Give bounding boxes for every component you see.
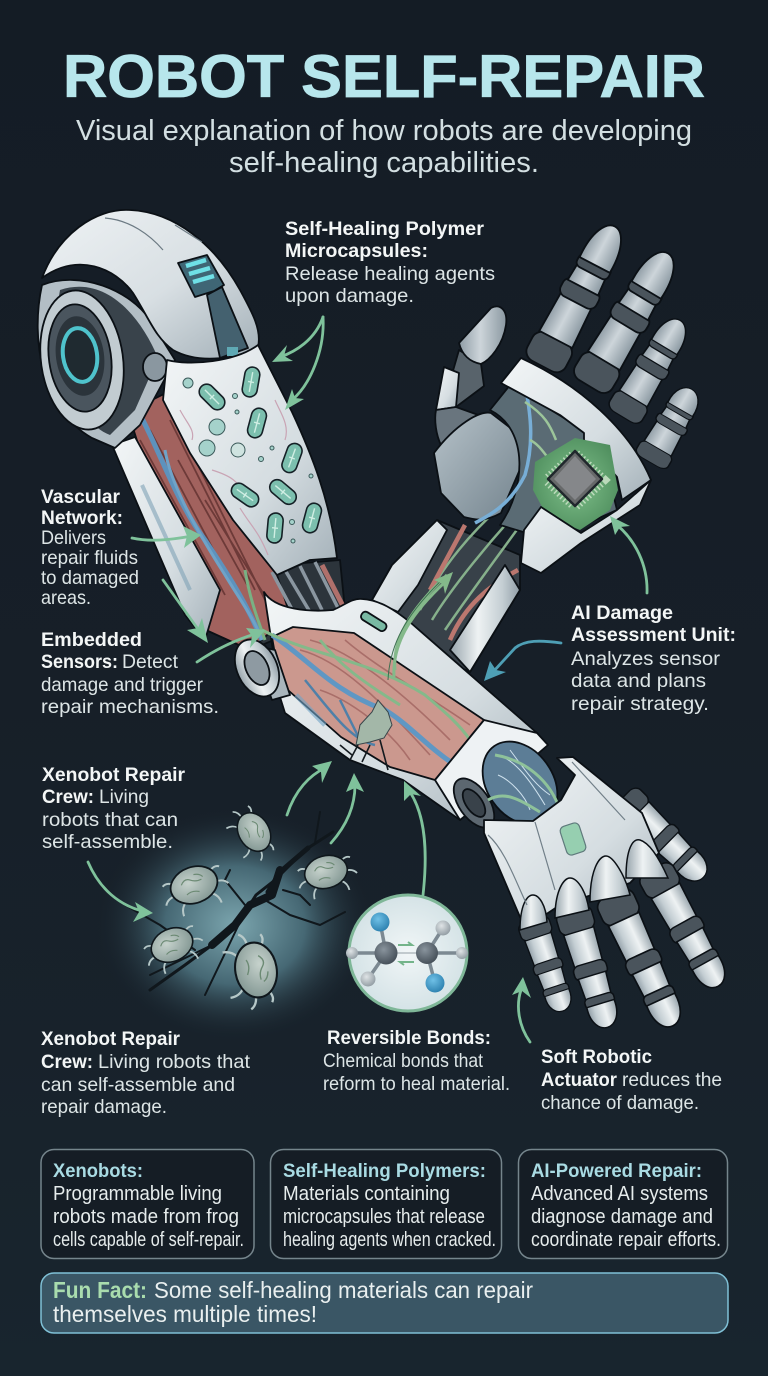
label: reversible bonds: Reversible Bonds: bbox=[327, 1028, 491, 1049]
callout: fun fact: themselves multiple times! bbox=[53, 1301, 317, 1327]
label: ai damage assessment unit: data and plans bbox=[571, 670, 706, 692]
lower palm plate bbox=[521, 480, 651, 573]
label: xenobot repair crew lower: Living robots that bbox=[98, 1051, 251, 1073]
label: vascular network: Delivers bbox=[41, 527, 106, 549]
forearm shell bbox=[264, 592, 537, 820]
illustration: forearm with exposed tissue bbox=[226, 575, 548, 820]
callout: fun fact: Fun Fact: bbox=[53, 1277, 147, 1303]
left metal strip bbox=[112, 437, 220, 640]
label: reversible bonds: Chemical bonds that bbox=[323, 1050, 484, 1072]
label: soft robotic actuator: chance of damage. bbox=[541, 1092, 699, 1114]
label: soft robotic actuator: Soft Robotic bbox=[541, 1047, 652, 1068]
label: xenobot repair crew lower: can self-assemble and bbox=[41, 1074, 235, 1096]
elbow joint bbox=[226, 632, 290, 704]
panel: ai-powered repair: coordinate repair efforts. bbox=[531, 1229, 721, 1251]
label: xenobot repair crew upper: Crew: bbox=[42, 787, 94, 808]
label: self-healing polymer microcapsules: upon damage. bbox=[285, 285, 414, 307]
palm top band bbox=[501, 358, 651, 500]
label: ai damage assessment unit: Analyzes sensor bbox=[571, 648, 721, 670]
illustration: upper robotic arm bbox=[32, 210, 345, 650]
back of hand bbox=[484, 757, 659, 927]
thumb bbox=[435, 306, 506, 445]
label: xenobot repair crew upper: self-assemble. bbox=[42, 831, 173, 853]
panel: self-healing polymers: Materials containing bbox=[283, 1183, 450, 1205]
arrow: teal to forearm bbox=[484, 641, 561, 681]
side bolt bbox=[143, 353, 167, 381]
label: vascular network bbox=[41, 487, 139, 609]
label: ai damage assessment unit: Assessment Unit: bbox=[571, 625, 736, 646]
arrow: crack to forearm 2 bbox=[331, 773, 364, 843]
label: xenobot repair crew upper: Living bbox=[99, 786, 149, 808]
panel: ai-powered repair: diagnose damage and bbox=[531, 1206, 713, 1228]
indicator and seams bbox=[559, 822, 587, 856]
arrow: soft robotic actuator bbox=[512, 977, 531, 1042]
label: embedded sensors: repair mechanisms. bbox=[41, 696, 219, 718]
panel: ai-powered repair: AI-Powered Repair: bbox=[531, 1160, 702, 1182]
thumb bbox=[610, 785, 716, 890]
lower fingers bbox=[517, 859, 735, 1034]
arrows: self-healing microcapsules bbox=[272, 317, 323, 410]
label: soft robotic actuator: Actuator bbox=[541, 1070, 618, 1091]
panel: xenobots: Xenobots: bbox=[53, 1160, 143, 1182]
arrow: xenobot crew bbox=[88, 862, 153, 922]
knuckle caps bbox=[520, 840, 668, 930]
label: ai damage assessment unit: repair strategy. bbox=[571, 693, 709, 715]
ai chip on green board bbox=[533, 438, 618, 530]
panel: self-healing polymers bbox=[270, 1150, 502, 1258]
label: xenobot repair crew lower: repair damage. bbox=[41, 1096, 167, 1118]
arrow: crack to forearm 1 bbox=[287, 761, 332, 815]
label: xenobot repair crew lower: Crew: bbox=[41, 1052, 93, 1073]
panel: ai-powered repair: Advanced AI systems bbox=[531, 1183, 708, 1205]
damage patch bbox=[340, 700, 392, 770]
arrow: embedded sensors 1 bbox=[163, 580, 208, 643]
illustration: wrist joint bbox=[446, 727, 573, 839]
label: vascular network: Vascular bbox=[41, 487, 121, 508]
arrow: reversible bonds bbox=[404, 781, 425, 895]
subtitle: self-healing capabilities. bbox=[229, 147, 539, 179]
collar bbox=[435, 720, 548, 820]
label: embedded sensors: Detect bbox=[122, 651, 179, 673]
tissue window bbox=[262, 575, 484, 780]
blue vessel bbox=[475, 378, 531, 523]
microcapsules bbox=[196, 366, 323, 544]
dome blue strip and indicator bbox=[178, 255, 248, 358]
panel: ai-powered repair bbox=[518, 1150, 728, 1258]
label: embedded sensors bbox=[41, 630, 219, 718]
illustration: lower robotic hand bbox=[484, 757, 735, 1034]
panel: xenobots: cells capable of self-repair. bbox=[53, 1229, 244, 1251]
palm plate bbox=[434, 413, 521, 520]
label: ai damage assessment unit: AI Damage bbox=[571, 603, 673, 624]
panel: self-healing polymers: microcapsules that release bbox=[283, 1206, 485, 1228]
panel: self-healing polymers: healing agents when cracked. bbox=[283, 1229, 496, 1251]
armor plate with capsules bbox=[163, 345, 337, 575]
label: xenobot repair crew lower: Xenobot Repair bbox=[41, 1029, 181, 1050]
title: ROBOT SELF-REPAIR bbox=[63, 43, 705, 110]
dome bbox=[42, 210, 259, 359]
arrow: ai damage assessment bbox=[610, 516, 647, 593]
label: ai damage assessment unit bbox=[571, 603, 736, 715]
label: soft robotic actuator bbox=[541, 1047, 722, 1114]
panel: xenobots: Programmable living bbox=[53, 1183, 222, 1205]
panel: self-healing polymers: Self-Healing Polymers: bbox=[283, 1160, 486, 1182]
label: self-healing polymer microcapsules: Release healing agents bbox=[285, 263, 495, 285]
subtitle bbox=[76, 115, 692, 179]
panel: xenobots: robots made from frog bbox=[53, 1206, 239, 1228]
arrow: embedded sensors 2 bbox=[197, 628, 265, 662]
illustration: crack with xenobots bbox=[95, 800, 375, 1043]
label: xenobot repair crew upper: Xenobot Repair bbox=[42, 765, 186, 786]
illustration: raised robotic hand bbox=[372, 216, 708, 672]
label: xenobot repair crew lower bbox=[41, 1029, 251, 1118]
label: self-healing polymer microcapsules: Self-Healing Polymer bbox=[285, 219, 485, 240]
subtitle: Visual explanation of how robots are developing bbox=[76, 115, 692, 147]
arrow: green up to palm bbox=[394, 572, 453, 677]
label: vascular network: areas. bbox=[41, 587, 91, 609]
arrow: vascular network bbox=[132, 526, 201, 548]
label: soft robotic actuator: reduces the bbox=[622, 1069, 722, 1091]
callout: fun fact bbox=[41, 1273, 728, 1333]
label: reversible bonds: reform to heal material. bbox=[323, 1073, 510, 1095]
label: xenobot repair crew upper bbox=[42, 765, 186, 853]
callout: fun fact: Some self-healing materials can repair bbox=[154, 1277, 533, 1303]
fingers bbox=[523, 216, 708, 471]
upper arm muscle and vessels bbox=[128, 392, 345, 650]
label: embedded sensors: damage and trigger bbox=[41, 674, 203, 696]
label: vascular network: repair fluids bbox=[41, 547, 138, 569]
label: reversible bonds bbox=[323, 1028, 510, 1095]
label: embedded sensors: Sensors: bbox=[41, 652, 118, 673]
hand wrist and cables bbox=[372, 490, 535, 672]
eye socket bbox=[32, 285, 132, 435]
label: vascular network: Network: bbox=[41, 508, 123, 529]
shoulder shell bbox=[38, 280, 175, 448]
crack bbox=[125, 812, 345, 995]
molecule: reversible bonds bbox=[346, 895, 468, 1011]
label: xenobot repair crew upper: robots that can bbox=[42, 809, 178, 831]
label: vascular network: to damaged bbox=[41, 567, 139, 589]
label: self-healing polymer microcapsules: Microcapsules: bbox=[285, 241, 428, 262]
panel: xenobots bbox=[41, 1150, 254, 1258]
label: self-healing polymer microcapsules bbox=[285, 219, 495, 307]
label: embedded sensors: Embedded bbox=[41, 630, 142, 651]
glow bbox=[95, 807, 375, 1043]
xenobots bbox=[138, 800, 361, 1013]
palm interior bbox=[490, 385, 617, 540]
indicator on forearm bbox=[359, 610, 388, 633]
